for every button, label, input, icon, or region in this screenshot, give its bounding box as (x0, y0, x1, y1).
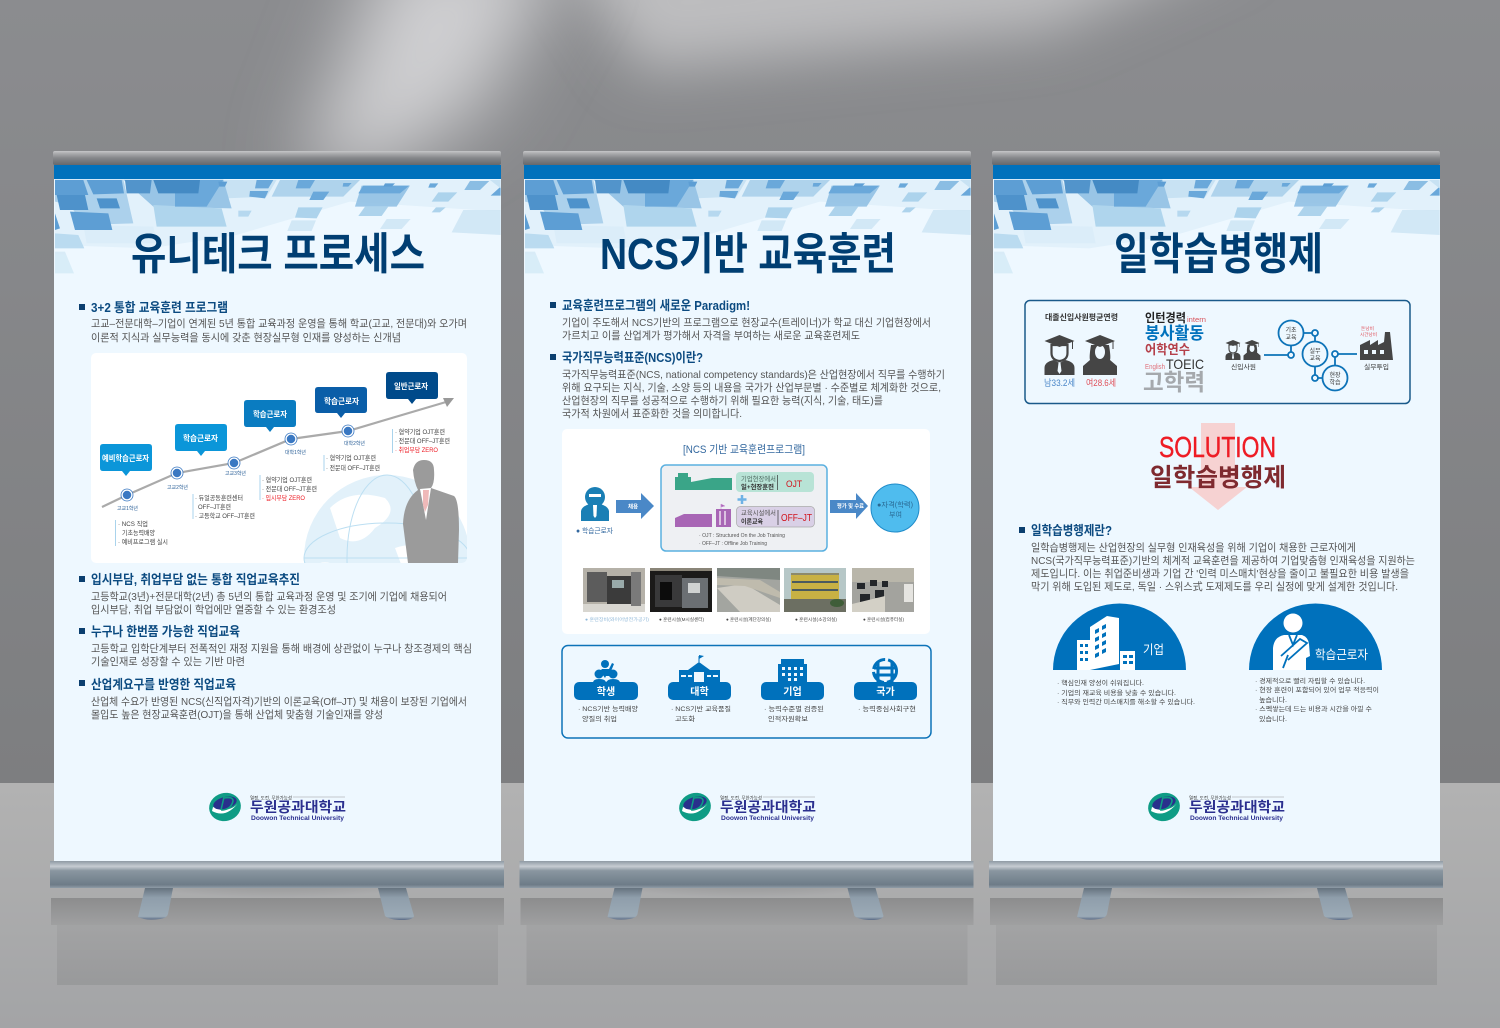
benefit: company: 인적자원확보 (768, 714, 808, 723)
OFF-JT box (736, 506, 814, 527)
bubble: learner 2: 학습근로자 (253, 409, 288, 419)
section: 3+2 program (79, 300, 467, 344)
section: what is work-study: 제도입니다. 이는 취업준비생과 기업 간 '인력 미스매치'현상을 줄이고 불필요한 비용 발생을 (1031, 567, 1409, 580)
note: grade 1 (116, 519, 168, 546)
note: grade 3: · 협약기업 OJT훈련 (262, 475, 312, 484)
icon: learner (581, 487, 609, 521)
arrow: evaluation (830, 493, 868, 519)
grade labels (117, 440, 365, 512)
section: 3+2 program: 이론적 지식과 실무능력을 동시에 갖춘 현장실무형 인재를 양성하는 신개념 (91, 331, 401, 344)
title: NCS기반 교육훈련 (600, 230, 896, 279)
OJT definitions: · OJT : Structured On the Job Training (699, 533, 785, 539)
background wall (0, 0, 1500, 784)
note: grade 1: · 예비프로그램 실시 (118, 537, 168, 546)
flow: training steps: 기초 (1285, 326, 1297, 334)
benefit: student: 양질의 취업 (582, 714, 617, 723)
flow: training steps: 교육 (1285, 334, 1297, 342)
diagram title: [NCS 기반 교육훈련프로그램] (683, 443, 805, 456)
OJT definitions: · OFF–JT : Offline Job Training (699, 541, 767, 547)
icon: factory: 실무투입 (1364, 362, 1389, 371)
note: grade 2 (193, 493, 255, 520)
banner stand: right (989, 861, 1443, 985)
flow: training steps: 실무 (1309, 347, 1321, 355)
benefit: college: 고도화 (675, 715, 695, 723)
note: grade 2: · 듀얼공동훈련센터 (195, 493, 243, 502)
learner label: ● 학습근로자 (576, 526, 614, 535)
OFF-JT box: 교육시설에서 (741, 508, 776, 517)
plus (738, 495, 746, 504)
chart: learner career path (91, 353, 467, 563)
logo: Doowon Technical University (206, 789, 346, 825)
word cloud: 인턴경력 (1145, 311, 1186, 325)
bubble: learner 3 (315, 387, 367, 418)
note: college 2: · 협약기업 OJT훈련 (395, 427, 445, 436)
section: no burden: 고등학교(3년)+전문대학(2년) 총 5년의 통합 교육과정 운영 및 조기에 기업에 채용되어 (91, 590, 447, 603)
section: industry demand: 몰입도 높은 현장교육훈련(OJT)을 통해 산업체 맞춤형 기술인재를 양성 (91, 708, 383, 721)
section: what is NCS: 위해 요구되는 지식, 기술, 소양 등의 내용을 국가가 산업부문별 · 수준별로 체계화한 것으로, (562, 381, 941, 394)
photo captions: ● 훈련시설(소강의실) (795, 616, 838, 623)
section: what is NCS: 국가직무능력표준(NCS)이란? (562, 350, 703, 365)
ages (1044, 377, 1116, 388)
word cloud: intern (1187, 317, 1206, 324)
photo: training machine (583, 568, 645, 612)
bubble: pre-learner: 예비학습근로자 (102, 453, 150, 463)
icon: factory: 돈낭비 (1361, 325, 1374, 332)
word cloud (1143, 311, 1206, 395)
benefit: company (761, 659, 824, 723)
banner stand: middle (520, 861, 974, 985)
globe illustration (304, 474, 467, 563)
benefit: nation: · 능력중심사회구현 (858, 704, 916, 713)
bubble: pre-learner (100, 444, 152, 476)
section: what is work-study: 막기 위해 도입된 제도로, 독일 · 스위스式 도제제도를 우리 실정에 맞게 설계한 것입니다. (1031, 580, 1398, 593)
panel: work-study banner (992, 151, 1440, 861)
banner stand: left (50, 861, 504, 985)
icon: buildings (1077, 616, 1135, 670)
section: what is NCS: 산업현장의 직무를 성공적으로 수행하기 위해 필요한 능력(지식, 기술, 태도)를 (562, 394, 883, 407)
OJT box: 기업현장에서 (741, 474, 776, 483)
section: anyone: 누구나 한번쯤 가능한 직업교육 (91, 624, 240, 639)
grade labels: 고교3학년 (225, 470, 246, 477)
note: college 1 (324, 453, 380, 472)
section: new paradigm (550, 298, 931, 342)
section: new paradigm: 교육훈련프로그램의 새로운 Paradigm! (562, 298, 750, 313)
section: new paradigm: 기업이 주도해서 NCS기반의 프로그램으로 현장교수(트레이너)가 학교 대신 기업현장에서 (562, 316, 931, 329)
section: what is work-study: 일학습병행제는 산업현장의 실무형 인재육성을 위해 기업이 채용한 근로자에게 (1031, 541, 1356, 554)
note: college 2 (392, 427, 450, 454)
icon: factory (1360, 325, 1393, 371)
note: grade 2: OFF–JT훈련 (198, 502, 231, 511)
solution heading (1150, 432, 1286, 492)
OJT box: 일+현장훈련 (741, 482, 774, 491)
circle: qualification (871, 484, 919, 532)
average age label: 대졸신입사원평균연령 (1045, 312, 1118, 322)
section: what is work-study: NCS(국가직무능력표준)기반의 체계적 교육훈련을 제공하여 기업맞춤형 인재육성을 지원하는 (1031, 554, 1415, 567)
flow: training steps: 교육 (1309, 356, 1321, 362)
section: what is NCS: 국가적 차원에서 표준화한 것을 의미합니다. (562, 408, 742, 420)
section: industry demand: 산업계요구를 반영한 직업교육 (91, 677, 236, 692)
benefit: company: · 능력수준별 검증된 (764, 704, 824, 713)
photo captions: ● 훈련시설(M시실센터) (659, 616, 705, 623)
icon: male graduate (1044, 335, 1074, 375)
benefit: nation: 국가 (876, 685, 895, 698)
box: benefits by stakeholder (562, 646, 931, 738)
grade labels: 대학1학년 (285, 449, 306, 456)
section: what is NCS (550, 350, 945, 420)
grade labels: 고교2학년 (167, 484, 188, 491)
benefit: learner semicircle (1249, 604, 1382, 723)
benefit: company semicircle: · 핵심인재 양성이 쉬워집니다. (1057, 678, 1144, 687)
circle: qualification: 부여 (889, 510, 902, 519)
note: grade 3: · 입시부담 ZERO (262, 494, 305, 502)
benefit: company semicircle: 기업 (1143, 643, 1164, 657)
icon: factory: 시간낭비 (1360, 331, 1377, 338)
OJT definitions (699, 533, 785, 547)
title: 일학습병행제 (1114, 230, 1323, 279)
section: what is work-study (1019, 523, 1415, 593)
logo: Doowon Technical University (676, 789, 816, 825)
section: 3+2 program: 3+2 통합 교육훈련 프로그램 (91, 300, 228, 315)
note: college 1: · 협약기업 OJT훈련 (326, 453, 376, 462)
icon: new employees (1226, 340, 1260, 371)
ages: 여28.6세 (1086, 377, 1116, 388)
section: no burden: 입시부담, 취업 부담없이 학업에만 열중할 수 있는 환경조성 (91, 603, 336, 616)
section: anyone: 기술인재로 성장할 수 있는 기반 마련 (91, 656, 245, 668)
benefit: learner semicircle: · 현장 훈련이 포함되어 있어 업무 적응력이 (1255, 685, 1379, 694)
section: what is NCS: 국가직무능력표준(NCS, national competency standards)은 산업현장에서 직무를 수행하기 (562, 368, 945, 381)
photo captions: ● 훈련장비(와이어방전가공기) (585, 616, 650, 623)
timeline nodes (122, 426, 353, 500)
section: no burden (79, 572, 447, 616)
section: what is work-study: 일학습병행제란? (1031, 523, 1112, 538)
arrow: evaluation: 평가 및 수료 (837, 502, 864, 510)
note: grade 3: · 전문대 OFF–JT훈련 (262, 484, 317, 493)
benefit: college (668, 655, 731, 723)
benefit: nation (854, 660, 917, 713)
note: grade 2: · 고등학교 OFF–JT훈련 (195, 511, 255, 520)
note: grade 1: · NCS 직업 (118, 519, 148, 528)
circle: qualification: ●자격(학력) (877, 500, 913, 509)
icon: new employees: 신입사원 (1231, 362, 1256, 371)
benefit: learner semicircle: · 경제적으로 빨리 자립할 수 있습니다. (1255, 676, 1365, 685)
benefit: learner semicircle: 높습니다. (1259, 695, 1287, 704)
section: 3+2 program: 고교–전문대학–기업이 연계된 5년 통합 교육과정 운영을 통해 학교(고교, 전문대)와 오가며 (91, 317, 467, 330)
photo: building (784, 568, 846, 612)
panel: Unitech process banner (53, 151, 501, 861)
benefit: company: 기업 (783, 685, 802, 698)
note: college 1: · 전문대 OFF–JT훈련 (326, 463, 380, 472)
benefit: college: · NCS기반 교육품질 (671, 704, 731, 713)
benefit: company semicircle: · 기업의 재교육 비용을 낮출 수 있습니다. (1057, 688, 1176, 697)
benefit: student: 학생 (597, 685, 615, 698)
word cloud: English (1145, 364, 1165, 371)
OFF-JT box: 이론교육 (741, 516, 763, 526)
photo captions: ● 훈련시설(컴퓨터실) (863, 616, 905, 623)
benefit: company semicircle (1053, 604, 1195, 706)
benefit: company semicircle: · 직무와 인력간 미스매치를 해소할 수 있습니다. (1057, 697, 1195, 706)
bubble: learner 1: 학습근로자 (183, 433, 219, 443)
OJT box (736, 472, 814, 492)
title: 유니테크 프로세스 (131, 230, 425, 279)
flow: training steps: 현장 (1329, 371, 1341, 379)
benefit: learner semicircle: 학습근로자 (1315, 648, 1368, 662)
growth arrow (102, 398, 454, 507)
word cloud: 어학연수 (1145, 342, 1190, 357)
benefit: learner semicircle: · 스펙쌓는데 드는 비용과 시간을 아낄 수 (1255, 704, 1372, 713)
icon: purple factory (675, 504, 731, 527)
solution heading: SOLUTION (1159, 432, 1276, 464)
section: anyone (79, 624, 472, 668)
bubble: general worker (386, 372, 438, 404)
photo captions (585, 616, 905, 623)
solution heading: 일학습병행제 (1150, 464, 1286, 492)
arrow: enroll: 채용 (628, 502, 638, 510)
bubble: learner 2 (244, 400, 296, 432)
word cloud: 봉사활동 (1145, 324, 1204, 343)
silhouette of a businessman (403, 460, 459, 563)
OFF-JT box: OFF–JT (781, 513, 812, 524)
benefit: student (574, 660, 638, 723)
section: industry demand (79, 677, 467, 721)
note: grade 1: 기초능력배양 (122, 528, 155, 537)
grade labels: 대학2학년 (344, 440, 365, 447)
note: college 2: · 전문대 OFF–JT훈련 (395, 436, 450, 445)
note: college 2: · 취업부담 ZERO (395, 446, 438, 454)
note: grade 3 (260, 475, 317, 502)
box: the problem (1025, 300, 1410, 404)
OJT box: OJT (786, 479, 802, 490)
background floor (0, 783, 1500, 1028)
icon: green factory (675, 473, 732, 490)
flow: training steps: 학습 (1329, 378, 1341, 386)
photo: computer lab (852, 568, 914, 612)
benefit: student: · NCS기반 능력배양 (578, 704, 638, 713)
section: no burden: 입시부담, 취업부담 없는 통합 직업교육추진 (91, 572, 300, 587)
panel: NCS training banner (523, 151, 971, 861)
word cloud: 고학력 (1143, 369, 1205, 395)
arrow: down to solution (1189, 423, 1247, 510)
bubble: learner 1 (175, 424, 227, 456)
benefit: college: 대학 (690, 685, 709, 698)
grade labels: 고교1학년 (117, 505, 138, 512)
photo: practice center (650, 568, 712, 612)
word cloud: TOEIC (1166, 356, 1204, 372)
section: new paradigm: 가르치고 이를 산업계가 평가해서 자격을 부여하는 새로운 교육훈련제도 (562, 329, 860, 342)
section: industry demand: 산업체 수요가 반영된 NCS(신직업자격)기반의 이론교육(Off–JT) 및 채용이 보장된 기업에서 (91, 695, 467, 708)
bubble: learner 3: 학습근로자 (324, 396, 360, 406)
ages: 남33.2세 (1044, 378, 1075, 388)
photo: lecture room (717, 568, 780, 612)
diagram: NCS training program (562, 429, 930, 634)
icon: worker with crossed arms (1273, 614, 1310, 670)
arrow: enroll (616, 493, 654, 519)
flow: training steps (1264, 320, 1357, 390)
bubble: general worker: 일반근로자 (394, 381, 429, 391)
icon: female graduate (1083, 335, 1117, 375)
box: OJT and OFF-JT (661, 465, 827, 551)
benefit: learner semicircle: 있습니다. (1259, 714, 1287, 723)
logo: Doowon Technical University (1145, 789, 1285, 825)
photo captions: ● 훈련시설(계단강의실) (726, 616, 772, 623)
section: anyone: 고등학교 입학단계부터 전폭적인 재정 지원을 통해 배경에 상관없이 누구나 창조경제의 핵심 (91, 642, 472, 655)
